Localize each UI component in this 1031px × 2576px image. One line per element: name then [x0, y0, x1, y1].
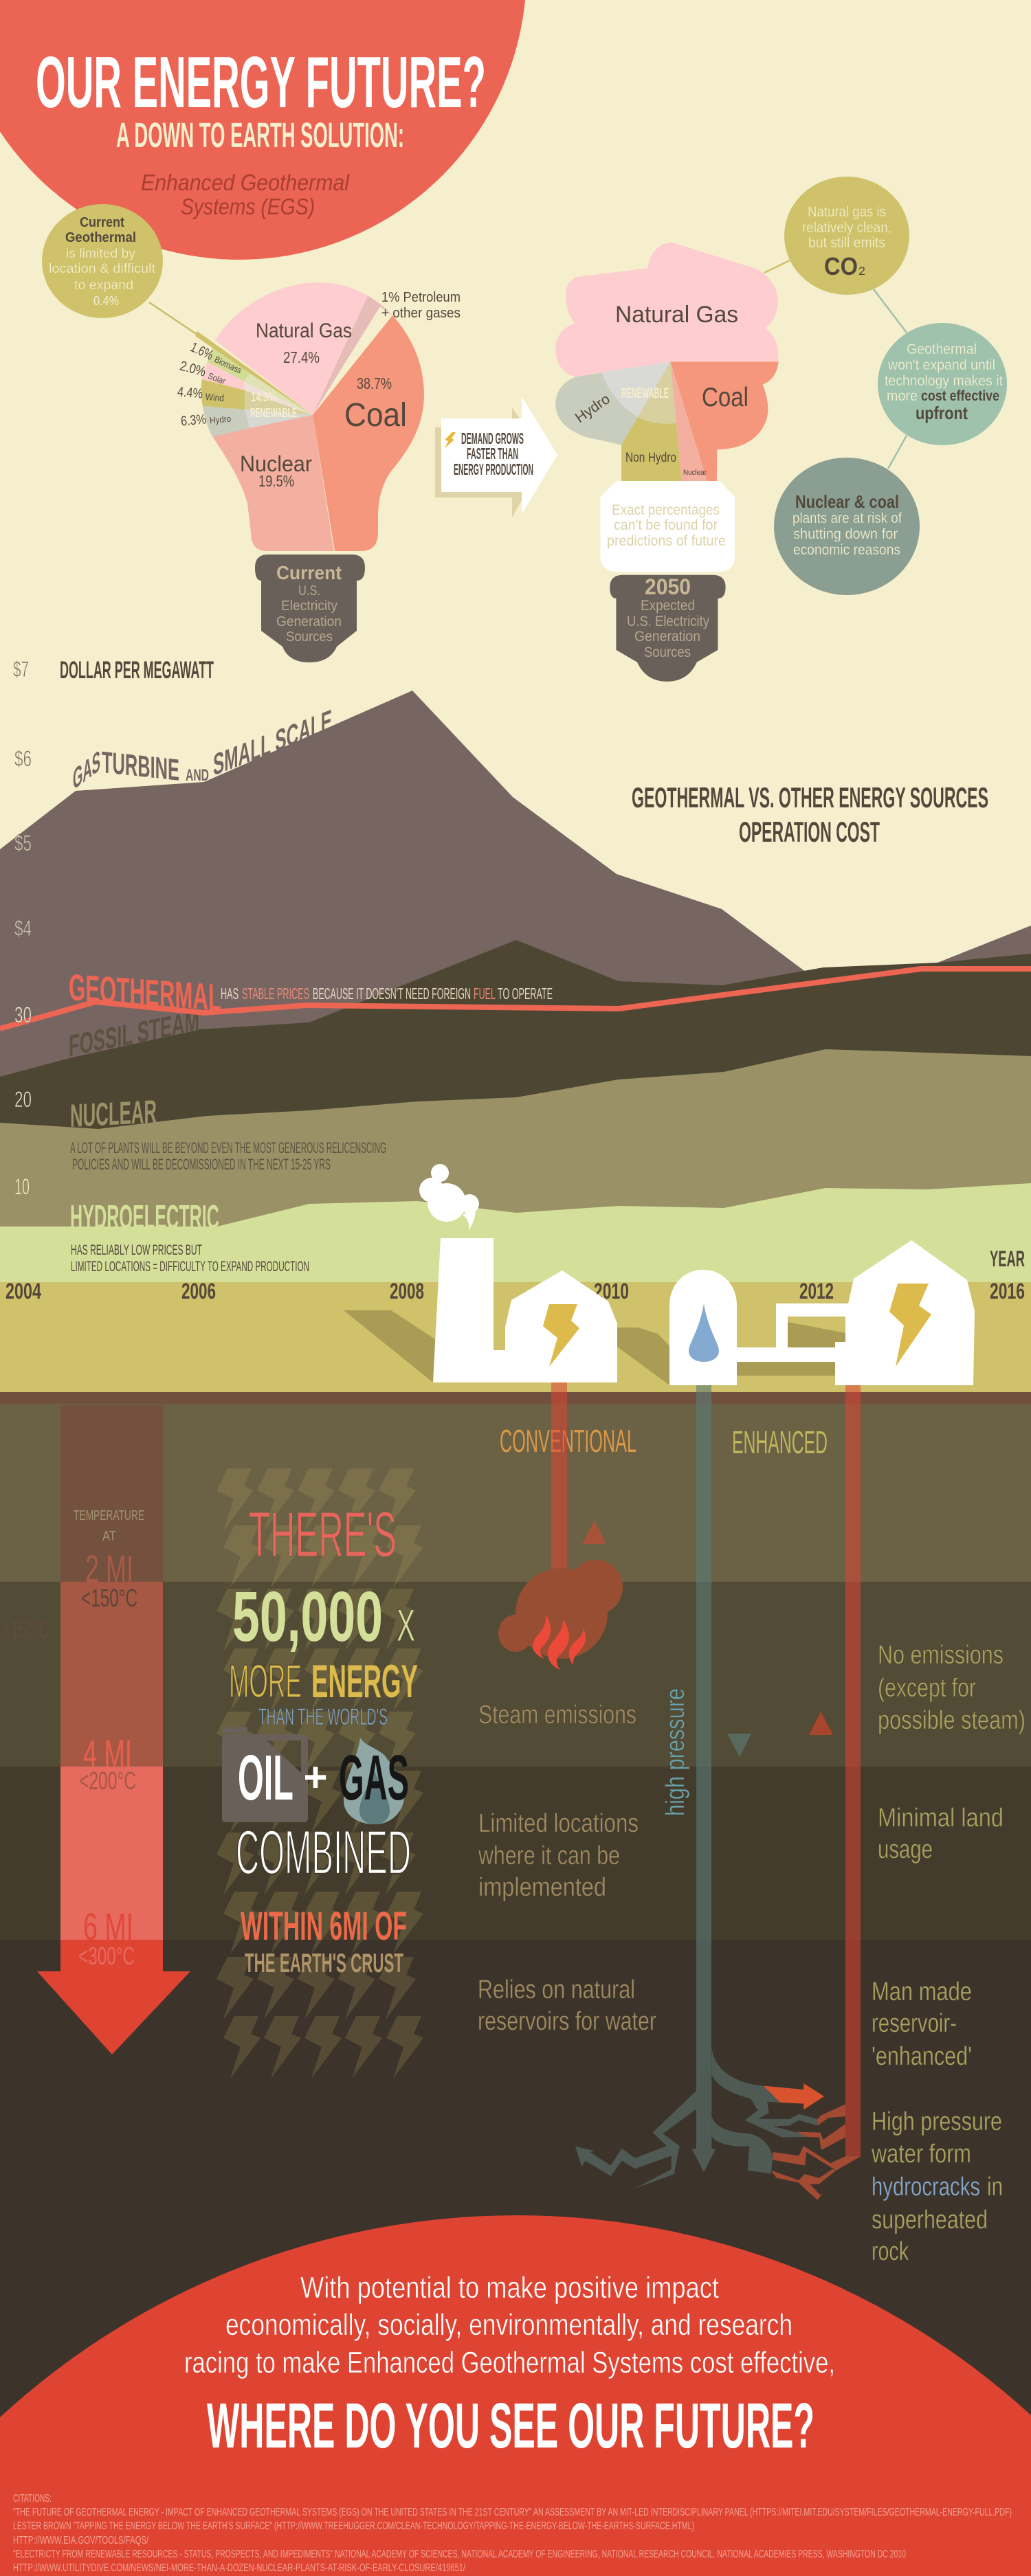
- current bulb labels: 1.6%: [188, 339, 216, 363]
- current bulb labels: Biomass: [213, 354, 243, 376]
- arrow: demand grows: ENERGY PRODUCTION: [454, 460, 533, 478]
- conventional notes: where it can be: [478, 1841, 620, 1870]
- callout: nuclear and coal: shutting down for: [793, 526, 898, 542]
- label: high pressure: high pressure: [661, 1688, 690, 1816]
- hydro note: HAS RELIABLY LOW PRICES BUT: [71, 1242, 202, 1258]
- ground: [0, 1282, 1031, 1392]
- current bulb base: U.S.: [298, 583, 320, 598]
- 2050 bulb labels: can't be found for: [614, 517, 718, 533]
- 2050 bulb labels: Exact percentages: [612, 502, 720, 518]
- callout: current geothermal: Current: [80, 215, 124, 230]
- current bulb base: [255, 555, 365, 662]
- citations: [13, 2493, 1012, 2574]
- enhanced notes: No emissions: [878, 1641, 1004, 1670]
- enhanced notes: water form: [871, 2140, 971, 2169]
- temperature depth arrow: <150°C: [81, 1584, 137, 1612]
- 2050 bulb labels: Hydro: [573, 391, 613, 426]
- current bulb labels: 6.3%: [180, 412, 207, 429]
- enhanced notes: (except for: [878, 1674, 976, 1703]
- current bulb base: Sources: [286, 629, 333, 645]
- nuclear note: POLICIES AND WILL BE DECOMISSIONED IN THE NEXT 15-25 YRS: [72, 1156, 331, 1173]
- hydro note: LIMITED LOCATIONS = DIFFICULTY TO EXPAND PRODUCTION: [71, 1259, 309, 1275]
- callout: nuclear and coal: economic reasons: [793, 542, 900, 558]
- y axis labels: $4: [14, 916, 32, 941]
- y axis labels: $7: [13, 657, 29, 682]
- callout: current geothermal: to expand: [74, 278, 133, 293]
- temperature depth arrow: [37, 1405, 190, 2054]
- enhanced notes: [871, 1641, 1026, 2266]
- enhanced notes: 'enhanced': [872, 2042, 972, 2071]
- oil plus gas: OIL: [238, 1742, 293, 1813]
- current bulb base: Current: [276, 562, 342, 583]
- current bulb labels: 4.4%: [177, 384, 203, 402]
- y axis labels: $6: [14, 746, 32, 771]
- callout: geothermal cost effective: cost effective: [921, 388, 999, 404]
- current bulb labels: Wind: [205, 391, 225, 403]
- closing statement: [184, 2271, 835, 2379]
- y axis labels: 10: [14, 1174, 30, 1199]
- enhanced notes: in: [987, 2173, 1003, 2202]
- 2050 bulb labels: [573, 302, 749, 660]
- icon: conventional plant: [433, 1238, 617, 1382]
- closing statement: economically, socially, environmentally, and research: [225, 2308, 792, 2342]
- geothermal note: FUEL: [474, 985, 496, 1003]
- enhanced notes: Minimal land: [878, 1804, 1004, 1833]
- closing statement: racing to make Enhanced Geothermal Systems cost effective,: [184, 2346, 835, 2379]
- callout: geothermal cost effective: Geothermal: [907, 341, 977, 357]
- 2050 bulb chart: [555, 243, 779, 682]
- callout: geothermal cost effective: upfront: [916, 403, 968, 423]
- 2050 bulb labels: Generation: [634, 629, 700, 645]
- current bulb labels: 27.4%: [283, 348, 320, 366]
- oil plus gas: +: [303, 1754, 328, 1800]
- center statement: MORE: [229, 1655, 302, 1707]
- 2050 bulb labels: Sources: [644, 645, 691, 660]
- current bulb labels: 19.5%: [258, 472, 294, 490]
- citations: CITATIONS:: [13, 2493, 52, 2505]
- callout: natural gas co2: but still emits: [808, 235, 885, 251]
- callout: geothermal cost effective: technology makes it: [885, 373, 1003, 389]
- 2050 bulb labels: Non Hydro: [625, 451, 676, 465]
- y axis labels: 30: [14, 1003, 32, 1027]
- callout: nuclear and coal: plants are at risk of: [792, 511, 902, 526]
- enhanced production pipe: [845, 1385, 861, 2157]
- hydro note: [71, 1242, 309, 1275]
- temperature depth arrow: <300°C: [78, 1942, 135, 1970]
- conventional notes: Steam emissions: [478, 1701, 636, 1729]
- enhanced notes: Man made: [872, 1978, 972, 2006]
- current bulb labels: 1% Petroleum: [381, 290, 461, 305]
- combined and crust statement: WITHIN 6MI OF: [241, 1904, 407, 1949]
- title block: Systems (EGS): [181, 194, 315, 219]
- conventional notes: Limited locations: [478, 1809, 639, 1838]
- hydrocrack fractures: [575, 2046, 861, 2200]
- conventional well pipe: [551, 1382, 567, 1575]
- center statement: [229, 1499, 418, 1730]
- current bulb labels: + other gases: [381, 306, 461, 321]
- 2050 bulb labels: U.S. Electricity: [627, 614, 709, 629]
- geothermal note: STABLE PRICES: [242, 985, 309, 1003]
- callout: natural gas co2: relatively clean,: [802, 220, 891, 236]
- callout: natural gas co2: Natural gas is: [808, 204, 886, 220]
- year axis: [5, 1246, 1025, 1303]
- 2050 bulb labels: Coal: [702, 383, 749, 412]
- temperature depth arrow: AT: [102, 1529, 116, 1544]
- callout: current geothermal: location & difficult: [49, 262, 156, 276]
- callout: current geothermal: Geothermal: [65, 230, 136, 245]
- title block: OUR ENERGY FUTURE?: [36, 42, 486, 123]
- callout: geothermal cost effective: more: [887, 388, 918, 404]
- 2050 bulb labels: 2050: [645, 574, 691, 599]
- closing statement: With potential to make positive impact: [300, 2271, 719, 2305]
- current bulb labels: Coal: [344, 397, 407, 434]
- combined and crust statement: [236, 1818, 411, 1978]
- icon: steam cloud: [419, 1164, 479, 1230]
- label: gas turbine and small scale: GAS: [73, 744, 100, 797]
- icon: water tank: [669, 1270, 737, 1385]
- y axis labels: $5: [14, 831, 32, 855]
- 2050 bulb labels: RENEWABLE: [621, 385, 669, 401]
- current bulb labels: 38.7%: [357, 374, 392, 392]
- heading: conventional: CONVENTIONAL: [500, 1423, 636, 1459]
- callout: natural gas co2: CO: [824, 252, 858, 280]
- y axis labels: 20: [14, 1087, 32, 1112]
- area: gas turbine and small scale: [0, 691, 1031, 1292]
- year axis: 2008: [390, 1279, 424, 1303]
- callout: geothermal cost effective: won't expand until: [887, 357, 995, 373]
- chart heading: OPERATION COST: [739, 816, 880, 848]
- arrow: demand grows: FASTER THAN: [467, 445, 518, 462]
- bolt pattern: [217, 1468, 423, 2079]
- footer circle: [0, 2215, 1031, 2576]
- conventional notes: reservoirs for water: [478, 2007, 656, 2036]
- current bulb labels: Solar: [207, 370, 228, 386]
- geothermal note: [221, 985, 553, 1003]
- geothermal note: TO OPERATE: [498, 985, 553, 1003]
- callout: natural gas co2: [764, 177, 909, 295]
- callout: current geothermal: is limited by: [66, 247, 136, 261]
- current bulb labels: Natural Gas: [256, 320, 352, 342]
- current bulb pie chart: [195, 282, 424, 551]
- center statement: ENERGY: [311, 1655, 418, 1707]
- 2050 bulb labels: Nuclear: [683, 469, 707, 477]
- surface shadows: [344, 1310, 845, 1385]
- title block: A DOWN TO EARTH SOLUTION:: [116, 115, 404, 155]
- area: fossil steam: [0, 940, 1031, 1292]
- title block: Enhanced Geothermal: [141, 170, 351, 195]
- conventional notes: Relies on natural: [478, 1975, 635, 2004]
- current bulb labels: 14.3%: [251, 390, 276, 404]
- geothermal note: HAS: [221, 985, 239, 1003]
- axis title: dollar per megawatt: DOLLAR PER MEGAWATT: [60, 657, 214, 684]
- temperature depth arrow: 2 MI: [85, 1547, 133, 1590]
- oil plus gas: GAS: [339, 1742, 409, 1813]
- title block: [36, 42, 486, 219]
- icon: enhanced plant: [835, 1240, 975, 1385]
- enhanced notes: reservoir-: [872, 2009, 957, 2038]
- enhanced injection pipe: [696, 1385, 711, 2155]
- icon: pipes: [737, 1303, 849, 1362]
- center statement: THERE'S: [249, 1499, 397, 1570]
- current bulb labels: 2.0%: [178, 359, 208, 380]
- geothermal note: BECAUSE IT DOESN'T NEED FOREIGN: [313, 985, 471, 1003]
- enhanced notes: hydrocracks: [872, 2173, 980, 2202]
- icon: oil can: [222, 1727, 308, 1822]
- current bulb labels: Hydro: [210, 414, 232, 425]
- temperature depth arrow: 4 MI: [83, 1732, 132, 1775]
- current bulb labels: RENEWABLE: [250, 406, 297, 420]
- enhanced notes: superheated: [872, 2206, 988, 2235]
- label: fossil steam: FOSSIL STEAM: [69, 1005, 199, 1063]
- callout: natural gas co2: 2: [858, 265, 865, 278]
- label: gas turbine and small scale: AND: [186, 766, 209, 785]
- label: geothermal: GEOTHERMAL: [69, 967, 221, 1019]
- callout: nuclear and coal: Nuclear & coal: [795, 491, 899, 512]
- arrow marker: conventional up: [582, 1521, 606, 1544]
- citations: HTTP://WWW.UTILITYDIVE.COM/NEWS/NEI-MORE-THAN-A-DOZEN-NUCLEAR-PLANTS-AT-RISK-OF-EARLY-CLOSURE/419651/: [13, 2562, 465, 2574]
- icon: gas flame: [344, 1738, 404, 1824]
- enhanced notes: usage: [878, 1835, 933, 1864]
- conventional reservoir: [498, 1560, 623, 1670]
- header circle: [0, 0, 525, 260]
- arrow: demand grows: [435, 396, 557, 517]
- conventional notes: [478, 1701, 656, 2036]
- year axis: 2006: [181, 1279, 216, 1303]
- conventional notes: implemented: [478, 1873, 606, 1902]
- 2050 bulb labels: predictions of future: [607, 533, 726, 549]
- callout: nuclear and coal: [774, 436, 920, 595]
- arrow marker: enhanced down: [727, 1734, 751, 1757]
- chart heading: [632, 781, 988, 848]
- center statement: 50,000: [232, 1577, 383, 1656]
- arrow: demand grows: DEMAND GROWS: [461, 429, 524, 447]
- citations: HTTP://WWW.EIA.GOV/TOOLS/FAQS/: [13, 2535, 148, 2546]
- area: hydroelectric: [0, 1183, 1031, 1292]
- arrow marker: enhanced up: [809, 1712, 833, 1735]
- label: hydroelectric: HYDROELECTRIC: [70, 1199, 219, 1236]
- enhanced notes: High pressure: [872, 2107, 1002, 2136]
- nuclear note: A LOT OF PLANTS WILL BE BEYOND EVEN THE MOST GENEROUS RELICENSCING: [70, 1139, 386, 1156]
- current bulb base: Generation: [276, 614, 342, 629]
- current bulb base: Electricity: [281, 598, 337, 614]
- label: gas turbine and small scale: SMALL SCALE: [213, 703, 332, 783]
- year axis: 2004: [5, 1279, 41, 1303]
- underground layers: [0, 1404, 1031, 2576]
- temperature depth arrow: 6 MI: [83, 1905, 133, 1948]
- current bulb labels: [177, 290, 461, 490]
- citations: LESTER BROWN "TAPPING THE ENERGY BELOW THE EARTH'S SURFACE" (HTTP://WWW.TREEHUGGER.COM/CLEAN-TECHNOLOGY/TAPPING-THE-ENERGY-BELOW-THE-EARTHS-SURFACE.HTML): [13, 2520, 694, 2532]
- callout: current geothermal: 0.4%: [93, 294, 119, 308]
- current bulb labels: Nuclear: [240, 451, 312, 476]
- area: nuclear: [0, 1049, 1031, 1292]
- center statement: X: [397, 1600, 415, 1650]
- temperature depth arrow: TEMPERATURE: [74, 1508, 144, 1523]
- combined and crust statement: COMBINED: [236, 1818, 411, 1888]
- ghost temperature label: <150°C: [3, 1615, 49, 1644]
- label: gas turbine and small scale: TURBINE: [102, 746, 179, 787]
- center statement: THAN THE WORLD'S: [258, 1704, 388, 1730]
- y axis labels: [13, 657, 32, 1199]
- line: geothermal: [0, 969, 1031, 1029]
- label: nuclear: NUCLEAR: [70, 1093, 157, 1134]
- oil plus gas: [238, 1742, 409, 1813]
- label: gas turbine and small scale: [73, 703, 332, 797]
- enhanced notes: rock: [872, 2237, 909, 2266]
- year axis: 2012: [799, 1279, 834, 1303]
- callout: geothermal cost effective: [874, 289, 1007, 445]
- 2050 bulb labels: Natural Gas: [615, 302, 738, 328]
- heading: enhanced: ENHANCED: [732, 1424, 828, 1460]
- temperature depth arrow: <200°C: [79, 1767, 136, 1795]
- callout: current geothermal: [42, 204, 197, 335]
- year axis: 2010: [594, 1279, 629, 1303]
- nuclear note: [70, 1139, 386, 1173]
- 2050 bulb labels: Expected: [641, 598, 695, 614]
- combined and crust statement: THE EARTH'S CRUST: [245, 1949, 403, 1978]
